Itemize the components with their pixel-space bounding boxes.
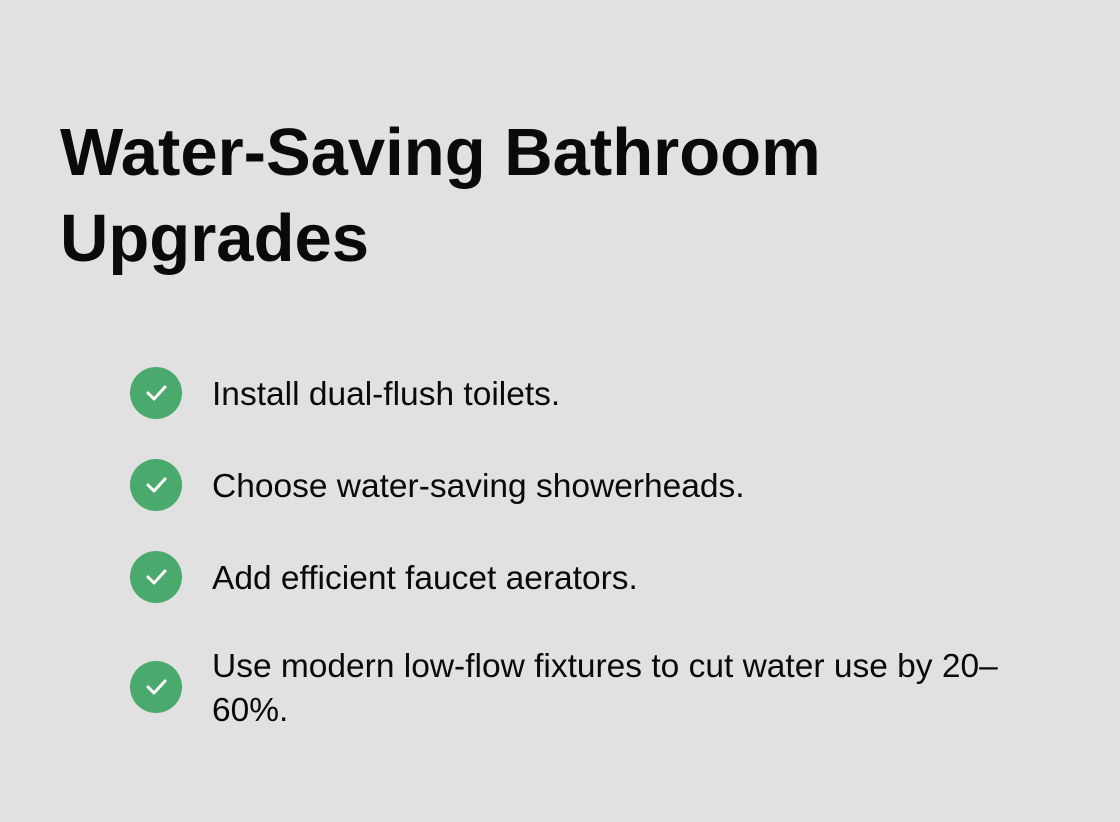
title (60, 115, 821, 276)
item 4 (130, 648, 998, 729)
text: 60%. (212, 692, 288, 729)
item 2 (130, 459, 745, 511)
icon: check (130, 661, 182, 713)
icon: check (130, 459, 182, 511)
text: Use modern low-flow fixtures to cut water use by 20– (212, 648, 998, 685)
text (212, 648, 998, 729)
icon: check (130, 551, 182, 603)
text: Install dual-flush toilets. (212, 376, 560, 413)
title: Water-Saving Bathroom (60, 115, 821, 190)
icon: check (130, 367, 182, 419)
item 1 (130, 367, 560, 419)
text: Choose water-saving showerheads. (212, 468, 745, 505)
title: Upgrades (60, 201, 369, 276)
text: Add efficient faucet aerators. (212, 560, 638, 597)
item 3 (130, 551, 638, 603)
